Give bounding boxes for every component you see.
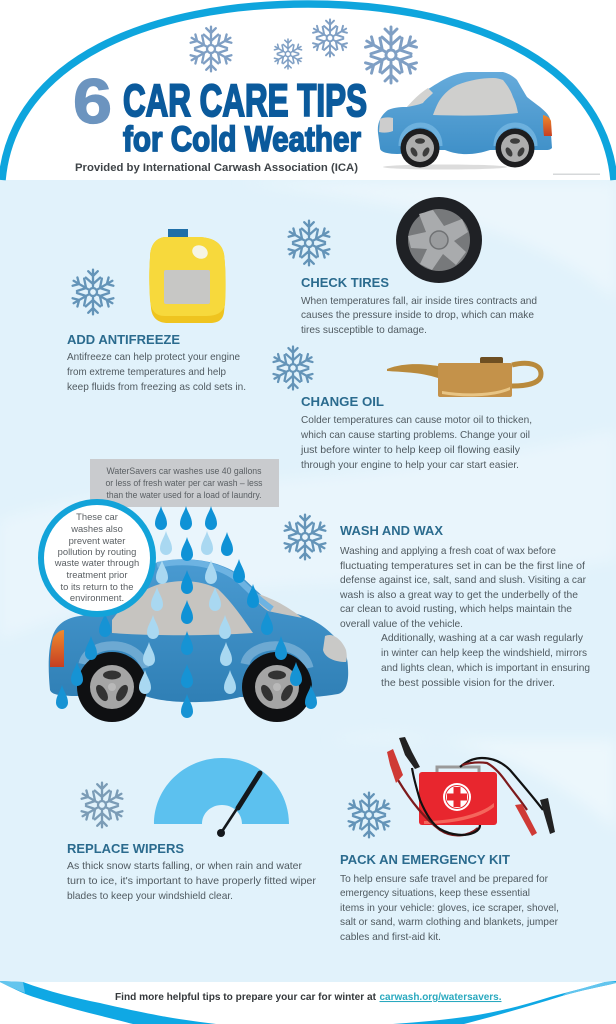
text: wash and wax: and lights clean, which is important in ensuring — [381, 663, 590, 674]
snowflake: wash and wax — [282, 515, 328, 559]
footer band — [0, 981, 616, 1024]
text: change oil: which can cause starting problems. Change your oil — [300, 430, 530, 441]
callout: water pollution circle — [41, 502, 153, 614]
text: pack an emergency kit: salt or sand, warm clothing and blankets, jumper — [340, 917, 559, 928]
text: wash and wax: car clean to avoid rusting, which helps maintain the — [340, 604, 572, 615]
icon: emergency kit with jumper cables — [387, 737, 555, 836]
title: for Cold Weather — [123, 119, 361, 159]
image credit mark — [553, 174, 600, 175]
snowflake: emergency kit — [346, 793, 392, 837]
text: pack an emergency kit: cables and first-aid kit. — [340, 932, 441, 943]
callout: gray water use box: or less of fresh water per car wash – less — [106, 477, 263, 488]
text: check tires: When temperatures fall, air inside tires contracts and — [301, 296, 537, 307]
callout: water pollution circle: treatment prior — [67, 569, 127, 580]
text: pack an emergency kit: PACK AN EMERGENCY KIT — [340, 852, 510, 867]
text: replace wipers: REPLACE WIPERS — [67, 841, 184, 856]
icon: header car — [378, 72, 552, 170]
text: change oil: through your engine to help your car start easier. — [301, 460, 519, 471]
text: pack an emergency kit: To help ensure safe travel and be prepared for — [340, 874, 549, 885]
text: change oil — [300, 394, 532, 471]
text: check tires — [301, 275, 537, 336]
title: CAR CARE TIPS — [123, 75, 367, 126]
text: wash and wax: Washing and applying a fresh coat of wax before — [340, 546, 556, 557]
text: pack an emergency kit — [340, 852, 559, 943]
text: wash and wax: wash is also a great way to get the underbelly of the — [339, 590, 578, 601]
callout: water pollution circle: prevent water — [69, 535, 125, 546]
text: wash and wax: defense against ice, salt, sand and slush. Visiting a car — [340, 575, 587, 586]
text: check tires: CHECK TIRES — [301, 275, 389, 290]
text: wash and wax: in winter can help keep the windshield, mirrors — [381, 648, 587, 659]
snowflake: antifreeze — [70, 270, 116, 314]
text: replace wipers: As thick snow starts falling, or when rain and water — [67, 861, 303, 872]
callout: water pollution circle: to its return to the — [61, 581, 133, 592]
text: change oil: CHANGE OIL — [301, 394, 384, 409]
text: add antifreeze: ADD ANTIFREEZE — [67, 332, 180, 347]
footer text with link: carwash.org/watersavers. — [380, 991, 502, 1003]
panel: light blue main background — [0, 180, 616, 982]
snowflake: replace wipers — [79, 783, 125, 827]
text: add antifreeze: keep fluids from freezing as cold sets in. — [67, 382, 246, 393]
footer text with link: Find more helpful tips to prepare your car for winter at — [115, 991, 376, 1003]
text: pack an emergency kit: emergency situations, keep these essential — [340, 888, 530, 899]
text: add antifreeze — [67, 332, 246, 393]
snowflake: check tires — [286, 221, 332, 265]
header snowflakes — [188, 19, 420, 83]
text: replace wipers: turn to ice, it's important to have properly fitted wiper — [67, 876, 317, 887]
snowflake: change oil — [271, 347, 315, 389]
callout: water pollution circle: waste water through — [54, 557, 139, 568]
text: wash and wax: fluctuating temperatures set in can be the first line of — [340, 561, 585, 572]
title: 6 — [73, 67, 112, 137]
callout: gray water use box: than the water used for a load of laundry. — [106, 489, 262, 500]
icon: large blue car — [49, 559, 348, 722]
icon: oil can — [387, 357, 541, 397]
callout: water pollution circle: washes also — [70, 523, 123, 534]
text: change oil: Colder temperatures can cause motor oil to thicken, — [301, 415, 532, 426]
text: pack an emergency kit: items in your vehicle: gloves, ice scraper, shovel, — [340, 903, 559, 914]
text: wash and wax: WASH AND WAX — [340, 523, 443, 538]
text: change oil: just before winter to help keep oil flowing easily — [300, 445, 521, 456]
text: wash and wax: overall value of the vehicle. — [340, 619, 463, 630]
subtitle: Provided by International Carwash Association (ICA) — [75, 162, 358, 174]
callout: water pollution circle: pollution by routing — [58, 546, 136, 557]
text: replace wipers — [67, 841, 317, 902]
callout: water pollution circle: These car — [76, 511, 118, 522]
callout: water pollution circle: environment. — [70, 592, 124, 603]
text: replace wipers: blades to keep your windshield clear. — [67, 891, 233, 902]
text: wash and wax: Additionally, washing at a car wash regularly — [381, 633, 584, 644]
icon: tire — [396, 197, 482, 283]
text: wash and wax: the best possible vision for the driver. — [381, 678, 555, 689]
header arc — [2, 4, 614, 180]
icon: falling water drops — [56, 506, 317, 718]
title — [73, 67, 367, 159]
text: check tires: tires susceptible to damage. — [301, 325, 427, 336]
icon: antifreeze bottle — [149, 229, 226, 323]
callout: gray water use box: WaterSavers car washes use 40 gallons — [106, 465, 262, 476]
text: check tires: causes the pressure inside to drop, which can make — [301, 310, 534, 321]
text: add antifreeze: from extreme temperatures and help — [67, 367, 226, 378]
icon: wiper gauge — [154, 758, 289, 837]
text: add antifreeze: Antifreeze can help protect your engine — [67, 352, 240, 363]
callout: gray water use box — [90, 459, 279, 507]
text: wash and wax — [339, 523, 590, 689]
